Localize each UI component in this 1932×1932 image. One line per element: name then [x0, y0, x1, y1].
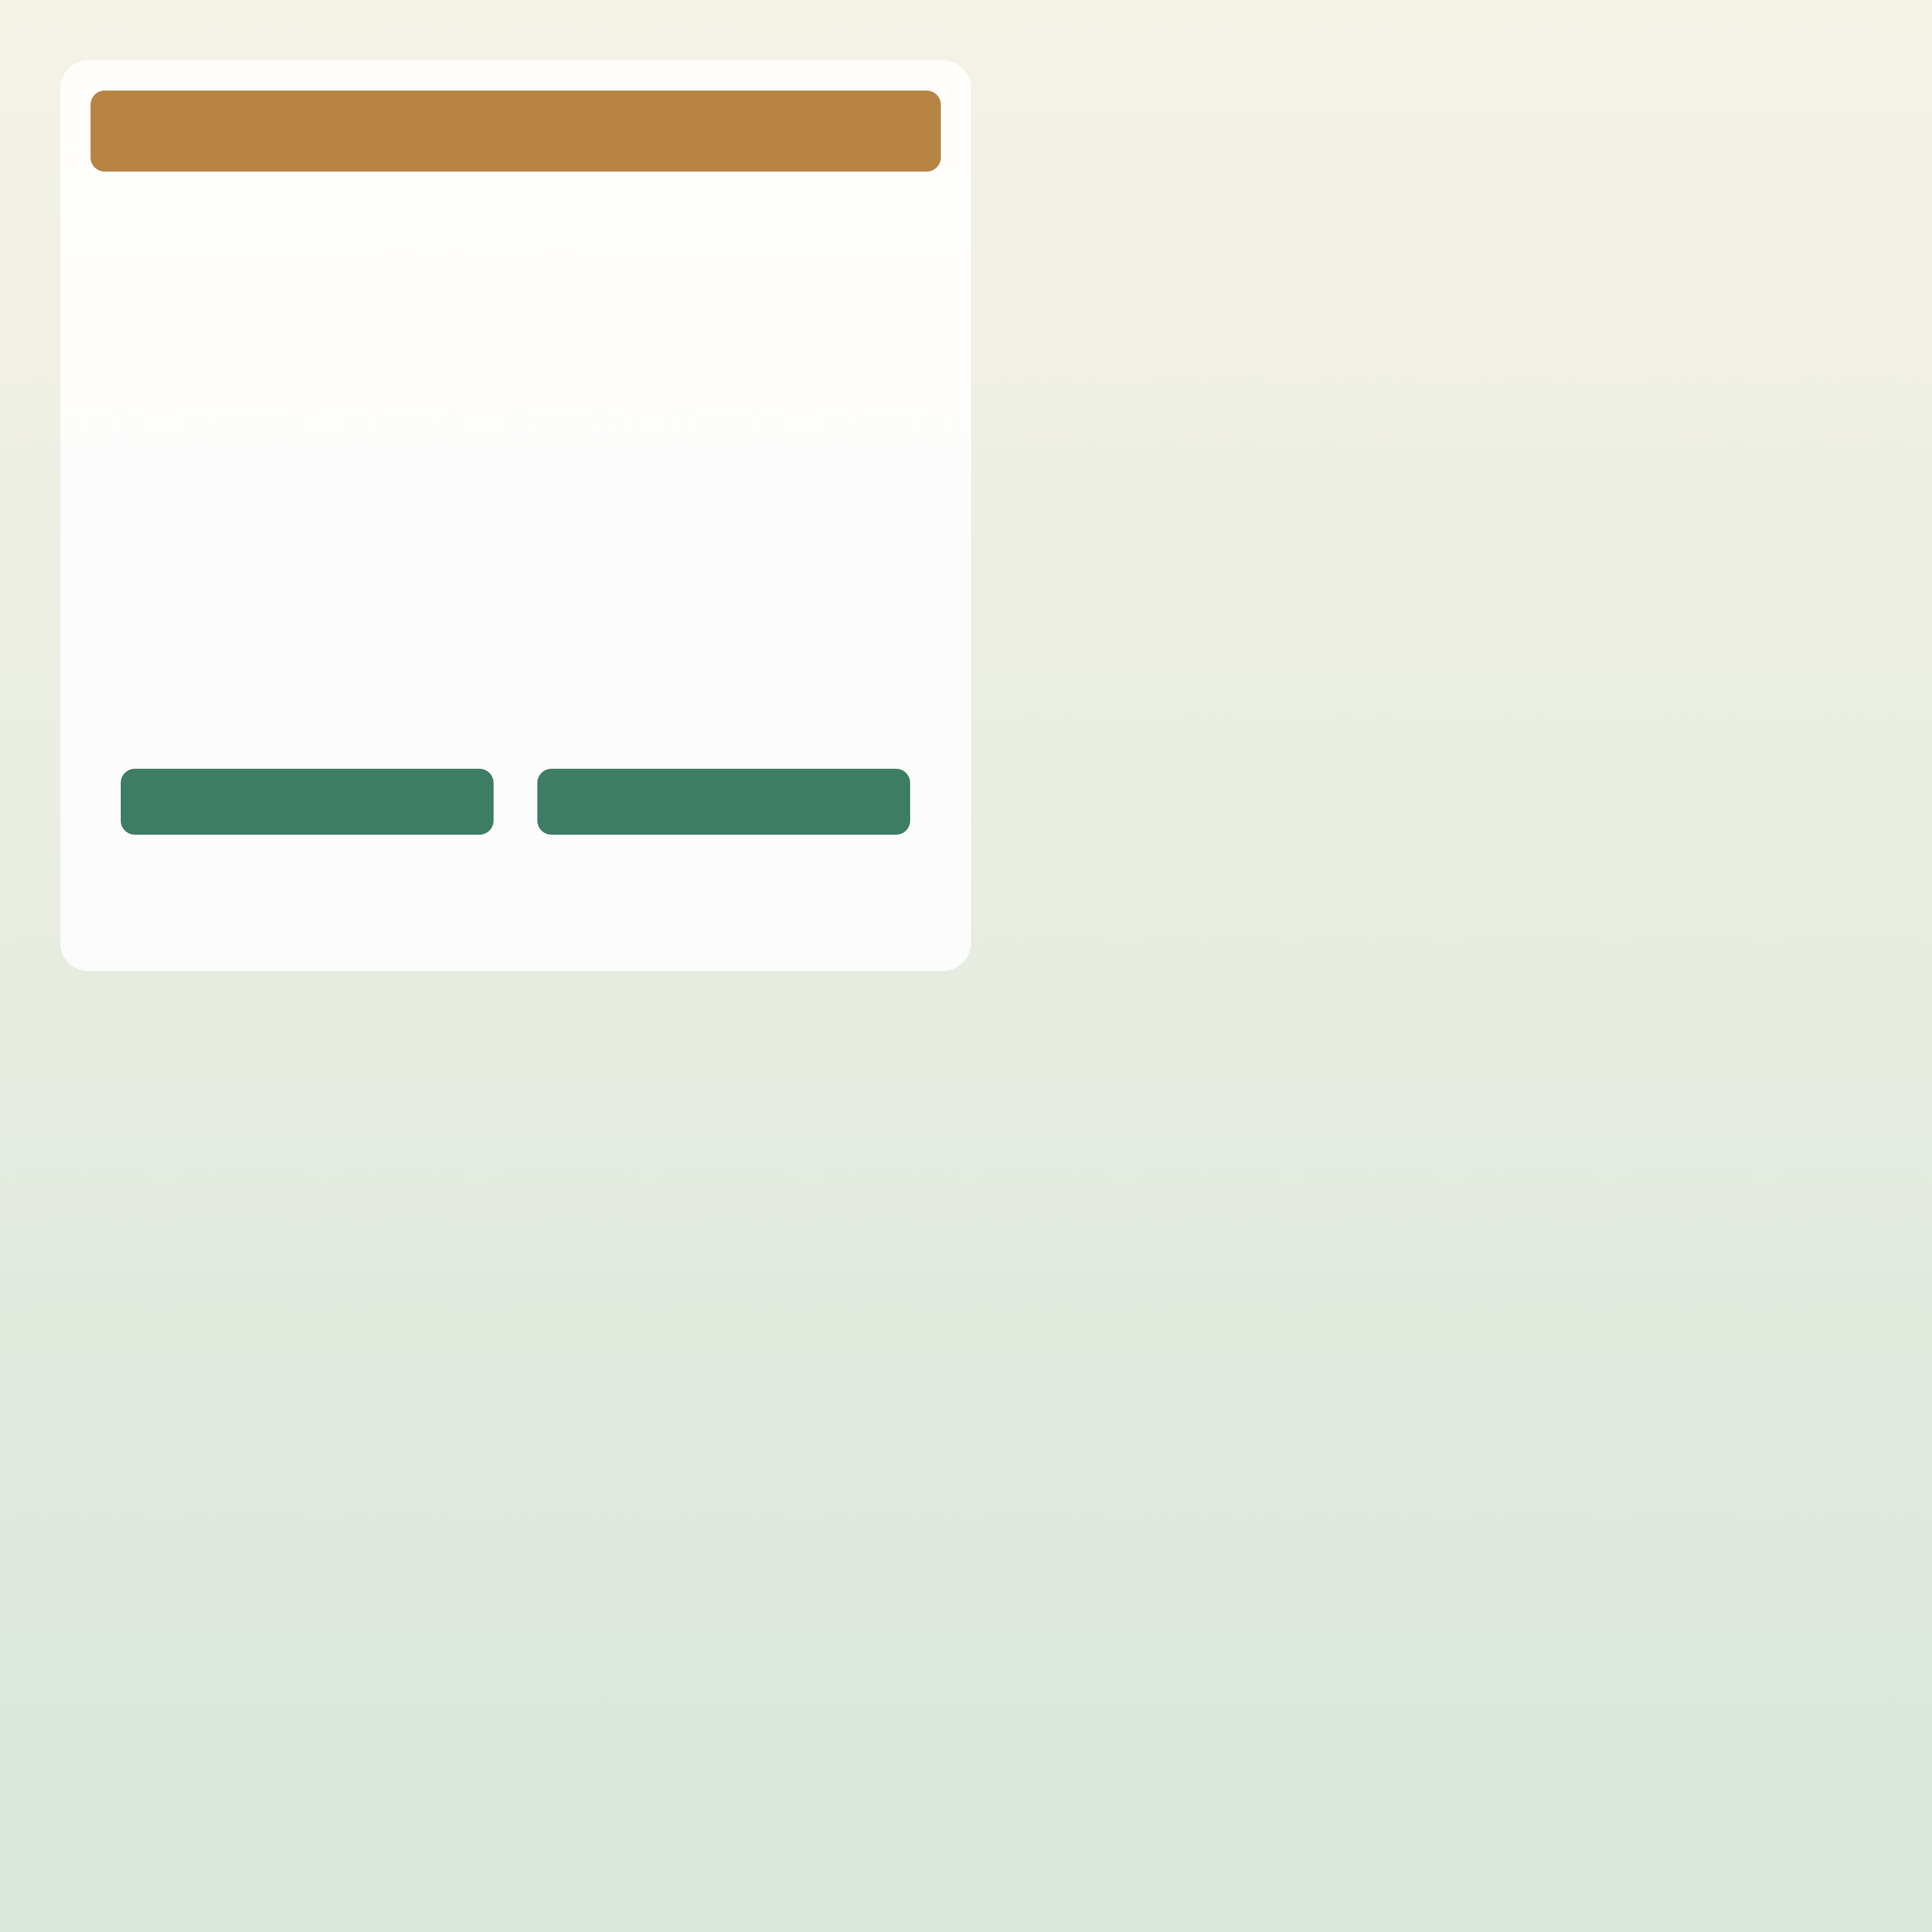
header banner — [91, 91, 941, 172]
panel: main card — [60, 60, 971, 971]
right green button — [537, 769, 910, 835]
left green button — [121, 769, 494, 835]
